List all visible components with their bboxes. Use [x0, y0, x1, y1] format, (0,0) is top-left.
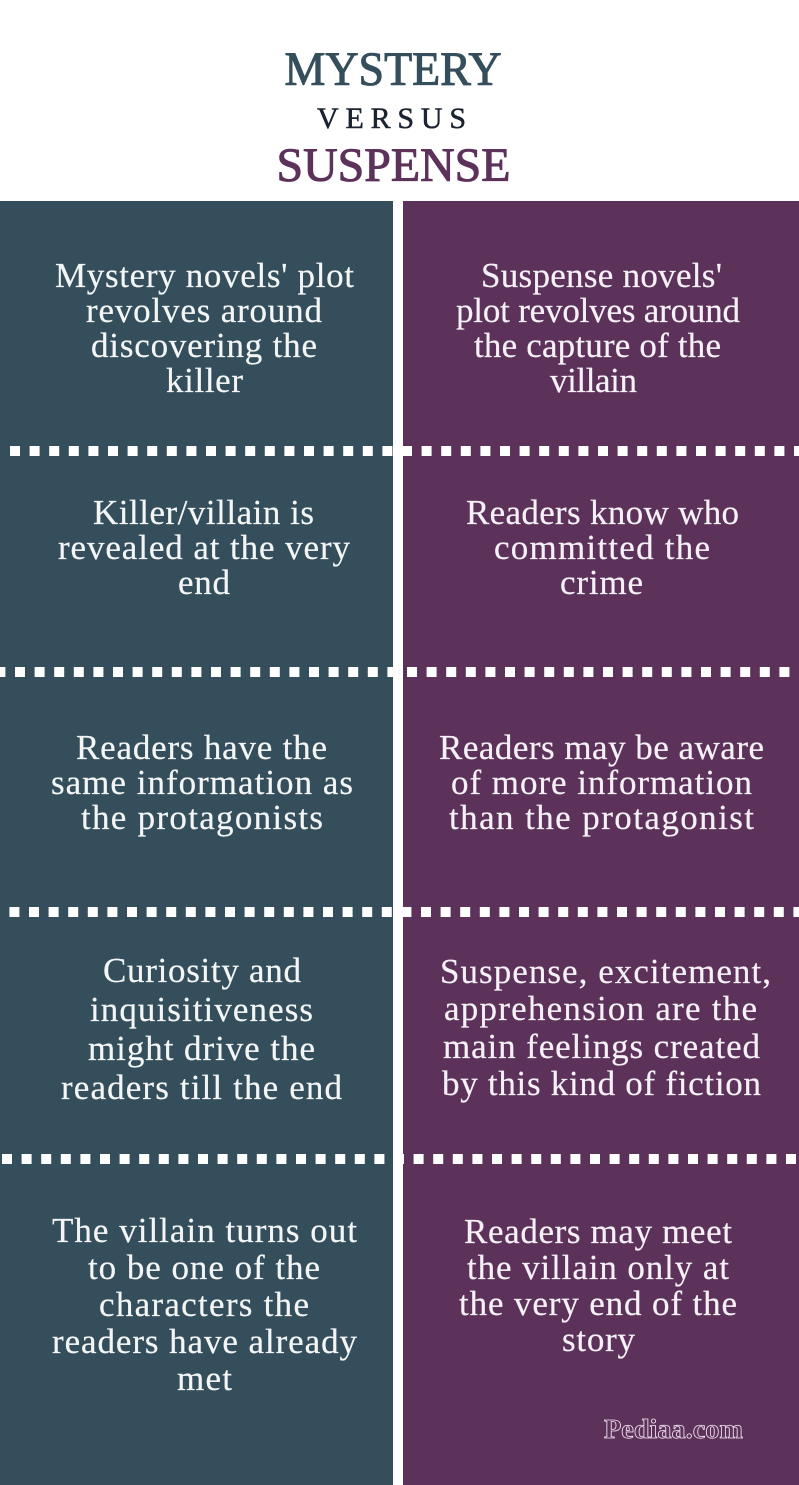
text: mystery row 3: same information as [51, 763, 353, 802]
heading: versus: VERSUS [317, 102, 466, 135]
panel: mystery column [0, 201, 393, 1485]
text: suspense row 4: Suspense, excitement, [440, 952, 771, 991]
text: mystery row 1: Mystery novels' plot [55, 256, 354, 295]
heading: suspense: SUSPENSE [276, 139, 510, 192]
text: mystery row 2 [58, 493, 350, 602]
panel: suspense column [403, 201, 799, 1485]
text: mystery row 1: discovering the [91, 326, 317, 365]
text: mystery row 3: the protagonists [81, 798, 323, 837]
text: suspense row 2 [466, 493, 739, 602]
text: suspense row 3: Readers may be aware [439, 728, 764, 767]
text: mystery row 5: to be one of the [88, 1248, 320, 1287]
text: mystery row 2: revealed at the very [58, 528, 350, 567]
text: suspense row 4: main feelings created [443, 1027, 760, 1066]
text: mystery row 5 [52, 1211, 358, 1398]
text: mystery row 5: met [177, 1359, 232, 1398]
text: suspense row 3: than the protagonist [449, 798, 754, 837]
text: mystery row 4: Curiosity and [103, 951, 302, 990]
text: suspense row 5: the very end of the [459, 1284, 737, 1323]
text: suspense row 2: crime [560, 563, 643, 602]
text: suspense row 2: committed the [494, 528, 710, 567]
text: suspense row 5 [459, 1212, 737, 1359]
heading: mystery: MYSTERY [284, 43, 502, 96]
dotted divider 4 [2, 1154, 799, 1164]
text: suspense row 5: story [562, 1320, 636, 1359]
text: mystery row 2: end [178, 563, 230, 602]
text: mystery row 4: might drive the [88, 1029, 315, 1068]
text: mystery row 5: The villain turns out [52, 1211, 357, 1250]
text: mystery row 4: inquisitiveness [90, 990, 313, 1029]
dotted divider 3 [9, 907, 799, 917]
text: suspense row 5: the villain only at [467, 1248, 729, 1287]
text: suspense row 2: Readers know who [466, 493, 739, 532]
text: suspense row 1: Suspense novels' [481, 256, 722, 295]
text: mystery row 4 [61, 951, 342, 1107]
text: suspense row 1: villain [550, 361, 637, 400]
text: mystery row 1 [55, 256, 354, 400]
text: suspense row 1 [456, 256, 740, 400]
text: mystery row 3: Readers have the [76, 728, 327, 767]
text: mystery row 3 [51, 728, 353, 837]
text: mystery row 2: Killer/villain is [93, 493, 314, 532]
text: mystery row 1: killer [166, 361, 243, 400]
text: mystery row 5: characters the [99, 1285, 309, 1324]
text: suspense row 3: of more information [451, 763, 752, 802]
text: mystery row 4: readers till the end [61, 1068, 342, 1107]
dotted divider 1 [10, 446, 799, 456]
text: suspense row 4: apprehension are the [444, 989, 757, 1028]
text: suspense row 4 [440, 952, 771, 1103]
text: suspense row 1: the capture of the [474, 326, 721, 365]
text: mystery row 5: readers have already [52, 1322, 358, 1361]
logo: Pediaa.com: Pediaa.com [604, 1414, 744, 1444]
text: suspense row 4: by this kind of fiction [442, 1064, 761, 1103]
text: mystery row 1: revolves around [86, 291, 322, 330]
text: suspense row 1: plot revolves around [456, 291, 740, 330]
text: suspense row 5: Readers may meet [464, 1212, 732, 1251]
dotted divider 2 [0, 667, 799, 677]
text: suspense row 3 [439, 728, 764, 837]
title [276, 43, 510, 192]
